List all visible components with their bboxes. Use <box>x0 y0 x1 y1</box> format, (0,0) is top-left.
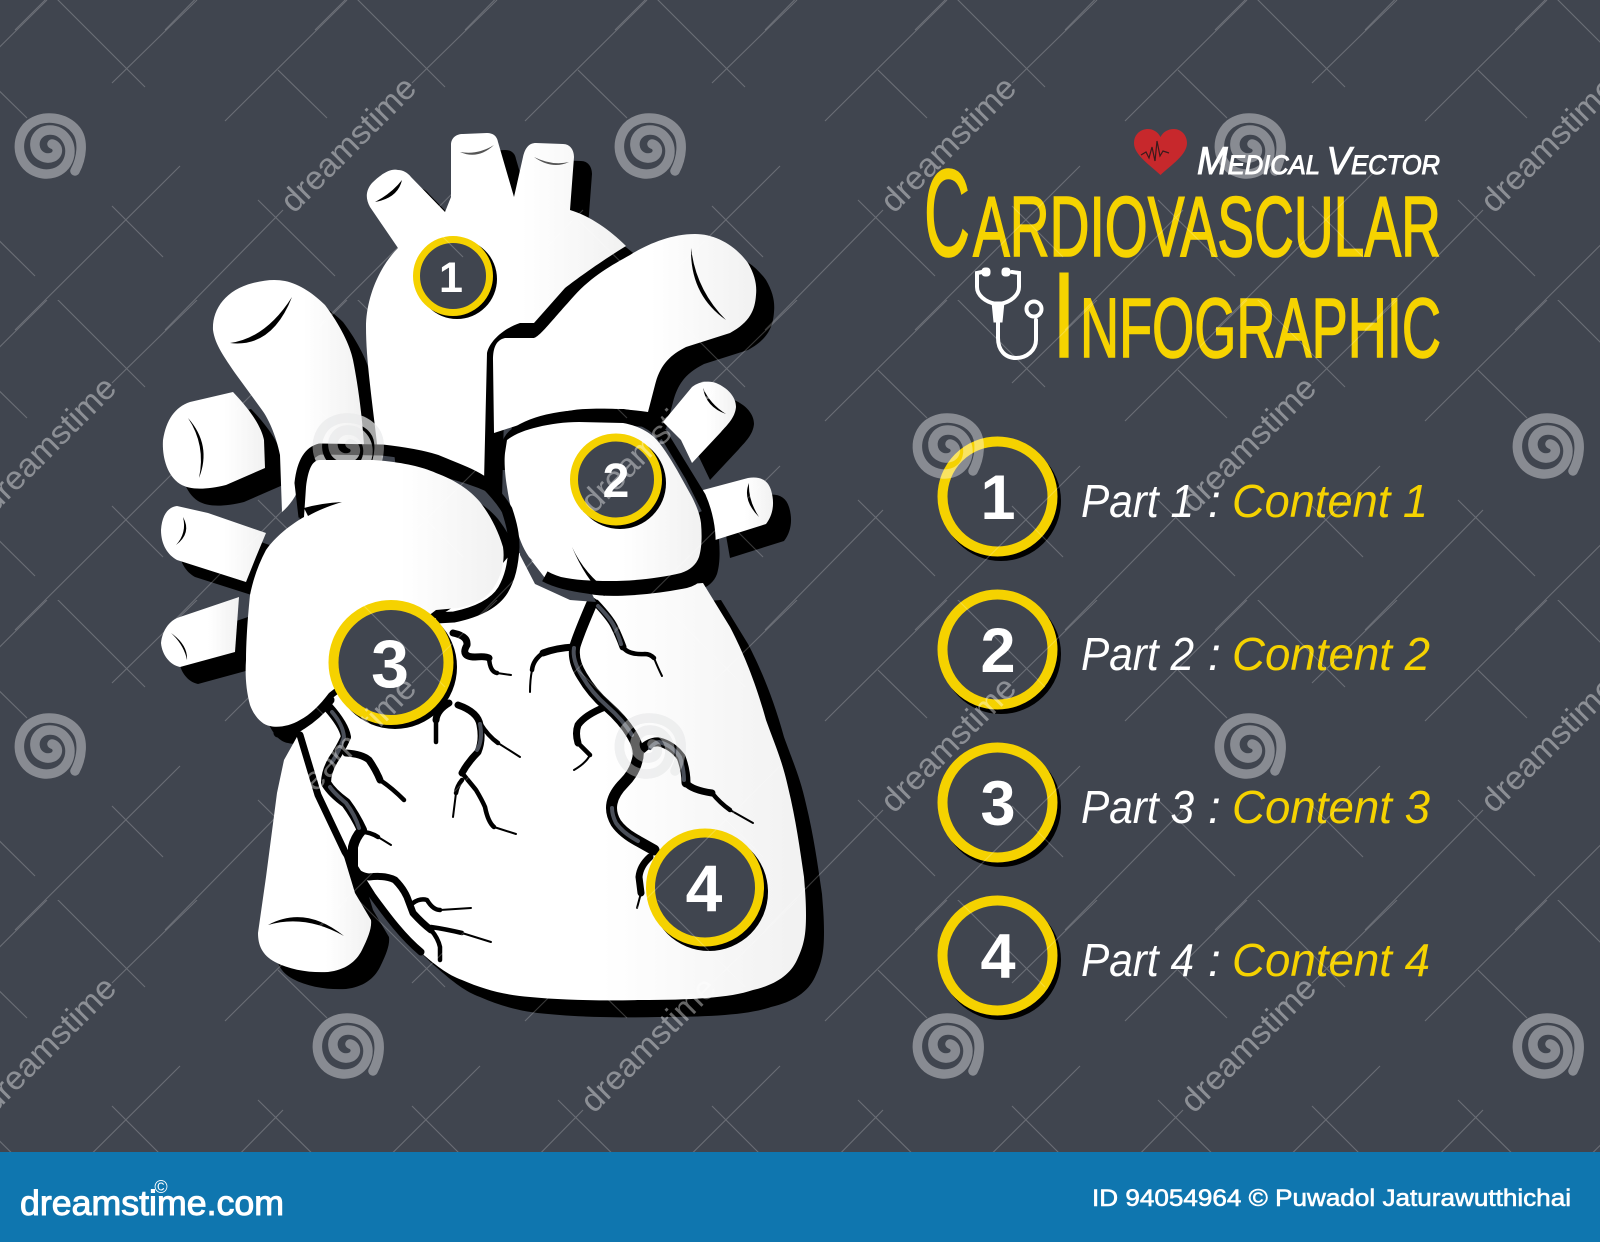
subtitle: Medical Vector: MEDICAL VECTOR <box>1197 140 1440 183</box>
right atrium outline <box>300 449 514 618</box>
heart marker 4: 4 <box>686 851 723 925</box>
footer logo: dreamstime.com <box>20 1184 284 1223</box>
icon: red heart with ECG <box>1134 129 1187 175</box>
list item 1 <box>941 441 1428 561</box>
list item 1: 1 <box>980 463 1016 533</box>
list item 3: : <box>1208 781 1221 833</box>
list item 3: Content 3 <box>1232 781 1430 833</box>
watermark text: dreamstime <box>873 669 1023 819</box>
watermark text: dreamstime <box>873 69 1023 219</box>
watermark text: dreamstime <box>1173 969 1323 1119</box>
watermark text: dreamstime <box>573 969 723 1119</box>
watermark text: dreamstime <box>573 369 723 519</box>
slate gap under left atrium <box>519 525 596 602</box>
title: Cardiovascular: C <box>924 145 970 283</box>
list item 4: Part 4 <box>1081 934 1194 986</box>
list item 2: Part 2 <box>1081 628 1194 680</box>
great vessels and veins <box>161 133 773 972</box>
coronary vessels <box>326 603 753 960</box>
watermark text: dreamstime <box>1173 369 1323 519</box>
list item 4: 4 <box>980 922 1016 992</box>
heart marker 2: 2 <box>603 455 629 508</box>
left atrium <box>505 422 702 581</box>
image credit: ID 94054964 © Puwadol Jaturawutthichai <box>1092 1185 1571 1212</box>
title: Infographic <box>1052 247 1441 383</box>
right atrium <box>246 460 504 727</box>
title: Infographic: I <box>1052 247 1076 383</box>
heart marker 1 <box>416 239 497 319</box>
list item 3: 3 <box>980 769 1016 839</box>
icon: stethoscope <box>977 268 1042 358</box>
list item 1: Content 1 <box>1232 475 1428 527</box>
right atrium lower outline <box>278 700 330 734</box>
left ventricle edge line <box>300 735 421 952</box>
heart illustration <box>161 133 824 1017</box>
heart drop shadow <box>179 150 824 1017</box>
list item 4: : <box>1208 934 1221 986</box>
watermark spirals <box>19 118 1579 1074</box>
heart marker 4 <box>650 833 768 951</box>
list item 2: Content 2 <box>1232 628 1430 680</box>
heart marker 3 <box>333 605 457 729</box>
list item 2: : <box>1208 628 1221 680</box>
list item 1: : <box>1208 475 1221 527</box>
list item 3 <box>941 747 1430 867</box>
footer logo: © <box>154 1177 168 1197</box>
vessel creases <box>171 145 759 936</box>
list item 4: Content 4 <box>1232 934 1430 986</box>
list item 1: Part 1 <box>1081 475 1194 527</box>
watermark text: dreamstime <box>273 669 423 819</box>
left atrium slate edge <box>660 440 700 512</box>
list item 2 <box>941 594 1430 714</box>
footer band <box>0 1152 1600 1242</box>
watermark text: dreamstime <box>273 69 423 219</box>
list item 2: 2 <box>980 616 1016 686</box>
list item 3: Part 3 <box>1081 781 1194 833</box>
faint watermark spirals on heart <box>317 418 681 774</box>
left atrium outline <box>505 415 710 590</box>
heart marker 2 <box>574 437 666 529</box>
heart marker 3: 3 <box>371 626 409 702</box>
ventricle body <box>297 550 806 1000</box>
heart marker 1: 1 <box>439 254 463 302</box>
title: Cardiovascular <box>924 145 1441 283</box>
list item 4 <box>941 900 1430 1020</box>
